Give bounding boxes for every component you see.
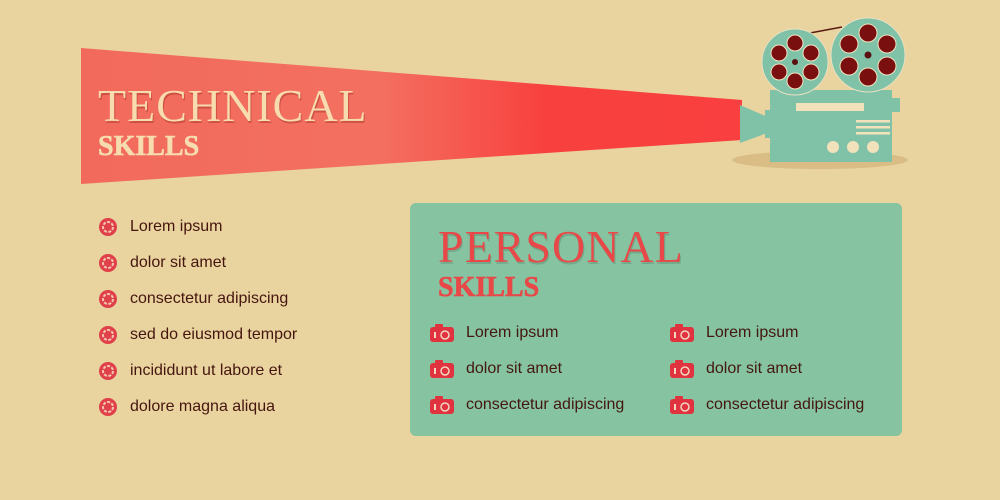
list: personal skills column 2: consectetur adipiscing (706, 396, 864, 413)
list: personal skills column 1: Lorem ipsum (466, 324, 558, 341)
list: personal skills column 1 (430, 324, 624, 414)
title: personal skills (438, 221, 684, 303)
list: technical skills: incididunt ut labore et (130, 362, 282, 379)
list: technical skills: consectetur adipiscing (130, 290, 288, 307)
list: personal skills column 2 (670, 324, 864, 414)
panel: personal skills (410, 203, 902, 436)
list: personal skills column 1: consectetur adipiscing (466, 396, 624, 413)
list: technical skills: dolor sit amet (130, 254, 226, 271)
title: technical skills: TECHNICAL (98, 80, 368, 131)
title: personal skills: PERSONAL (438, 221, 684, 272)
list: technical skills: Lorem ipsum (130, 218, 222, 235)
list: personal skills column 2: dolor sit amet (706, 360, 802, 377)
list: personal skills column 2: Lorem ipsum (706, 324, 798, 341)
list: technical skills (99, 218, 297, 416)
list: technical skills: dolore magna aliqua (130, 398, 275, 415)
title: technical skills: SKILLS (98, 131, 199, 162)
title: technical skills (98, 80, 368, 162)
list: personal skills column 1: dolor sit amet (466, 360, 562, 377)
title: personal skills: SKILLS (438, 272, 539, 303)
list: technical skills: sed do eiusmod tempor (130, 326, 297, 343)
icon: film projector (732, 18, 908, 169)
